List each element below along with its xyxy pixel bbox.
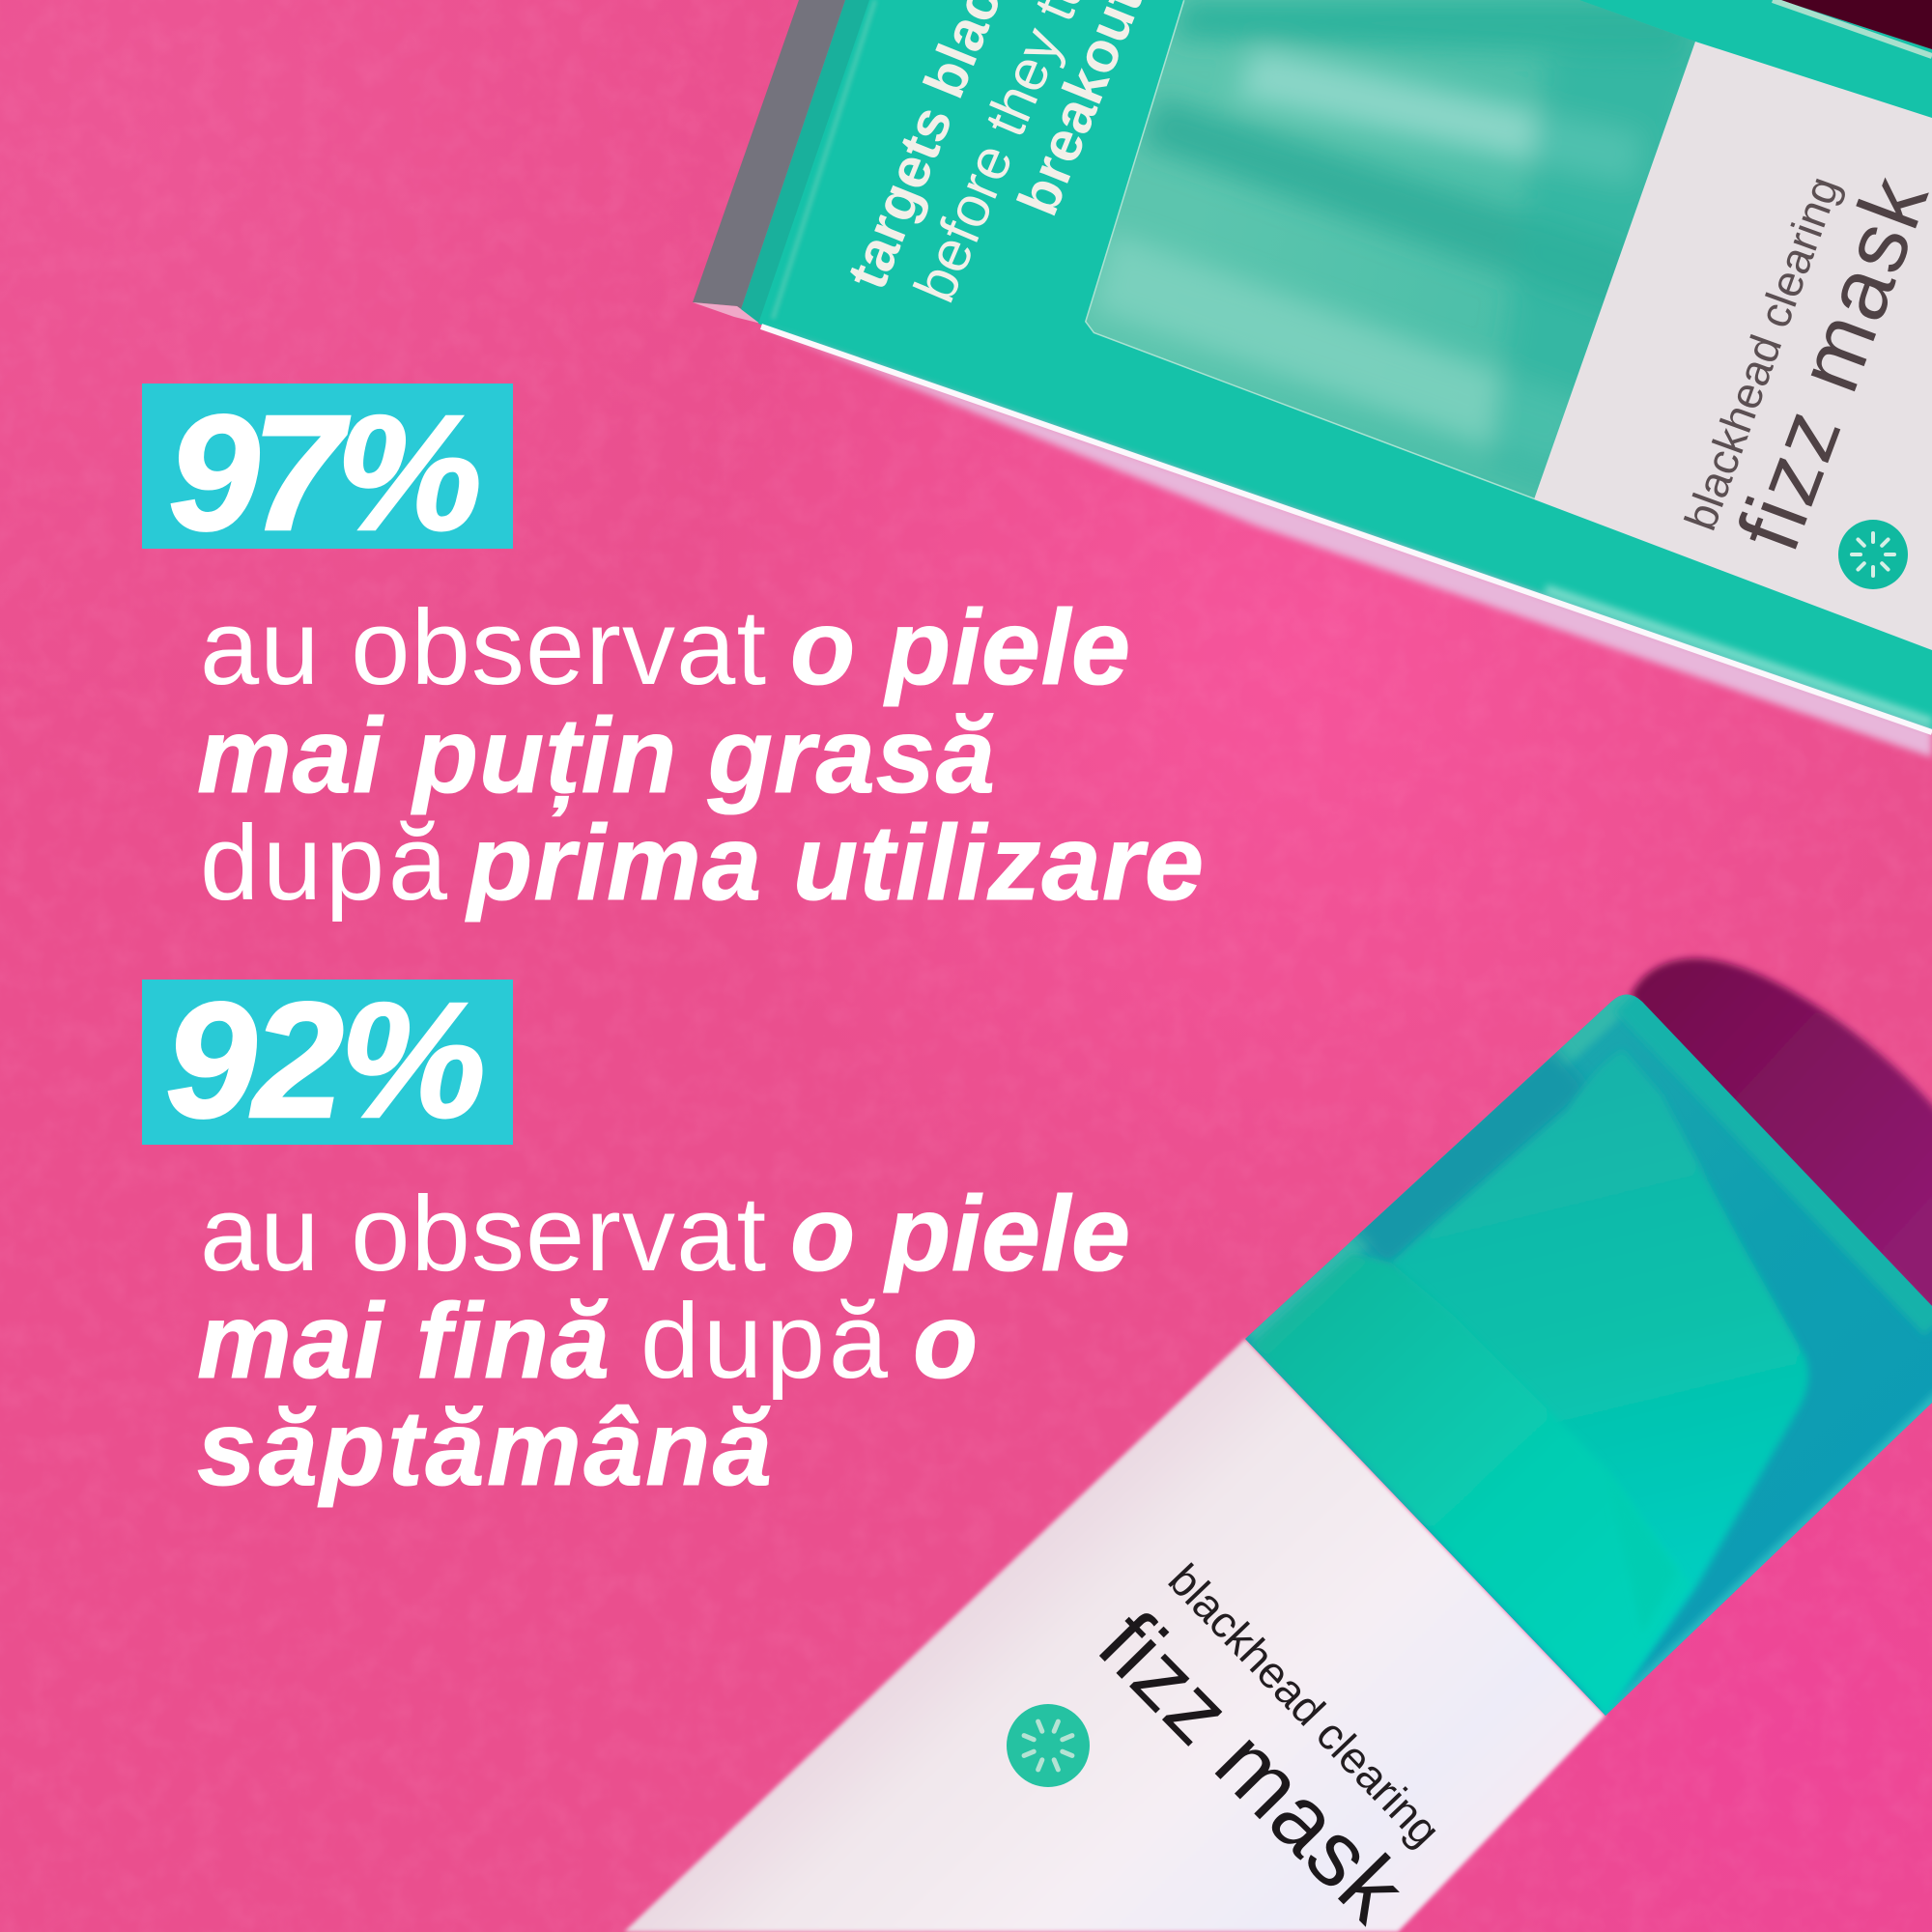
stat badge: 92%: 92% [165, 969, 486, 1152]
box top mint rim [1773, 0, 1932, 56]
box side flap paper edge [693, 302, 761, 324]
description: second statistic: mai fină [197, 1282, 610, 1401]
product box, top right [693, 0, 1932, 757]
tube label: fizz mask: fizz mask [1079, 1592, 1425, 1932]
cap base teal band [1251, 1254, 1690, 1716]
cap inner shoulder [1391, 1050, 1808, 1716]
description: first statistic: au observat [200, 588, 766, 707]
description: second statistic: săptămână [197, 1389, 772, 1508]
box folded lip [741, 0, 874, 325]
box lower edge [761, 327, 1932, 757]
box teal front face [758, 0, 1932, 729]
description: second statistic [197, 1175, 1130, 1508]
cap end rim [1633, 995, 1932, 1319]
cap upper rim [1245, 978, 1633, 1331]
description: second statistic: după [640, 1282, 889, 1401]
tube translucent cap [1236, 978, 1932, 1729]
box label: blackhead clearing: blackhead clearing [1675, 170, 1849, 536]
description: second statistic: o [913, 1282, 978, 1401]
description: first statistic: o piele [790, 588, 1130, 707]
description: first statistic: după [200, 804, 448, 923]
tube cast shadow [1631, 958, 1932, 1323]
box icon: cucumber slice [1838, 520, 1908, 589]
box tagline text [835, 0, 1167, 311]
stat badge: 97%: 97% [168, 382, 482, 565]
dark area beyond box [1780, 0, 1932, 49]
cap shoulder lower fade [1603, 1464, 1677, 1633]
tube white body [624, 1339, 1605, 1932]
product tube, bottom right [624, 978, 1932, 1932]
tube icon: cucumber slice [1007, 1704, 1090, 1787]
box side flap with faint print [693, 0, 845, 309]
box fold highlight [773, 0, 875, 319]
description: first statistic: mai puțin grasă [197, 696, 995, 815]
cap lower rim [1605, 1396, 1932, 1719]
box white label [1534, 42, 1932, 650]
description: second statistic: au observat [200, 1175, 766, 1293]
box window showing tube [1085, 0, 1695, 499]
description: second statistic: o piele [790, 1175, 1130, 1293]
description: first statistic: prima utilizare [465, 804, 1204, 923]
cap dark streak [1367, 1067, 1570, 1246]
tube label: blackhead clearing: blackhead clearing [1159, 1554, 1450, 1856]
description: first statistic [197, 588, 1204, 923]
